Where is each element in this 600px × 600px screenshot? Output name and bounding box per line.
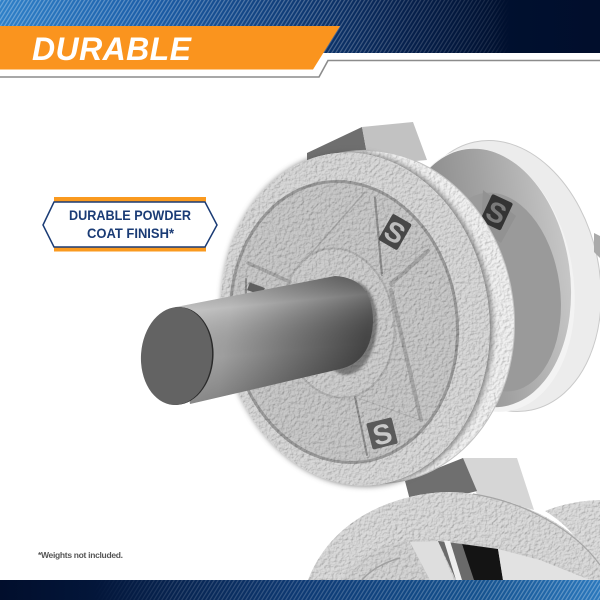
bottom band [0,580,600,600]
lower plate [308,492,600,580]
pin end cap [169,307,214,405]
front plate [220,152,490,486]
title banner [0,26,340,70]
back plate window [483,190,486,194]
S mark left partial [247,282,265,292]
second plate [218,150,515,490]
S mark lower: S [370,417,395,452]
back plate S mark: S [481,195,511,231]
lower plate right fragment [545,500,600,562]
rack lower leg [405,458,534,510]
S window lines [246,198,428,455]
hub [286,248,396,398]
callout: durable powder coat finish [43,197,217,252]
title: DURABLE [32,31,193,67]
callout text line 1: DURABLE POWDER [69,207,191,223]
spoke lines [248,192,428,420]
callout text line 2: COAT FINISH* [87,225,175,241]
top header band [0,0,600,53]
header underline [0,60,600,77]
back plate [430,140,600,412]
footnote: *Weights not included. [38,550,123,560]
pin [138,276,382,407]
S mark upper: S [379,214,411,251]
rack upper bracket [307,122,427,165]
product photo: weight plates on rack [138,122,600,580]
